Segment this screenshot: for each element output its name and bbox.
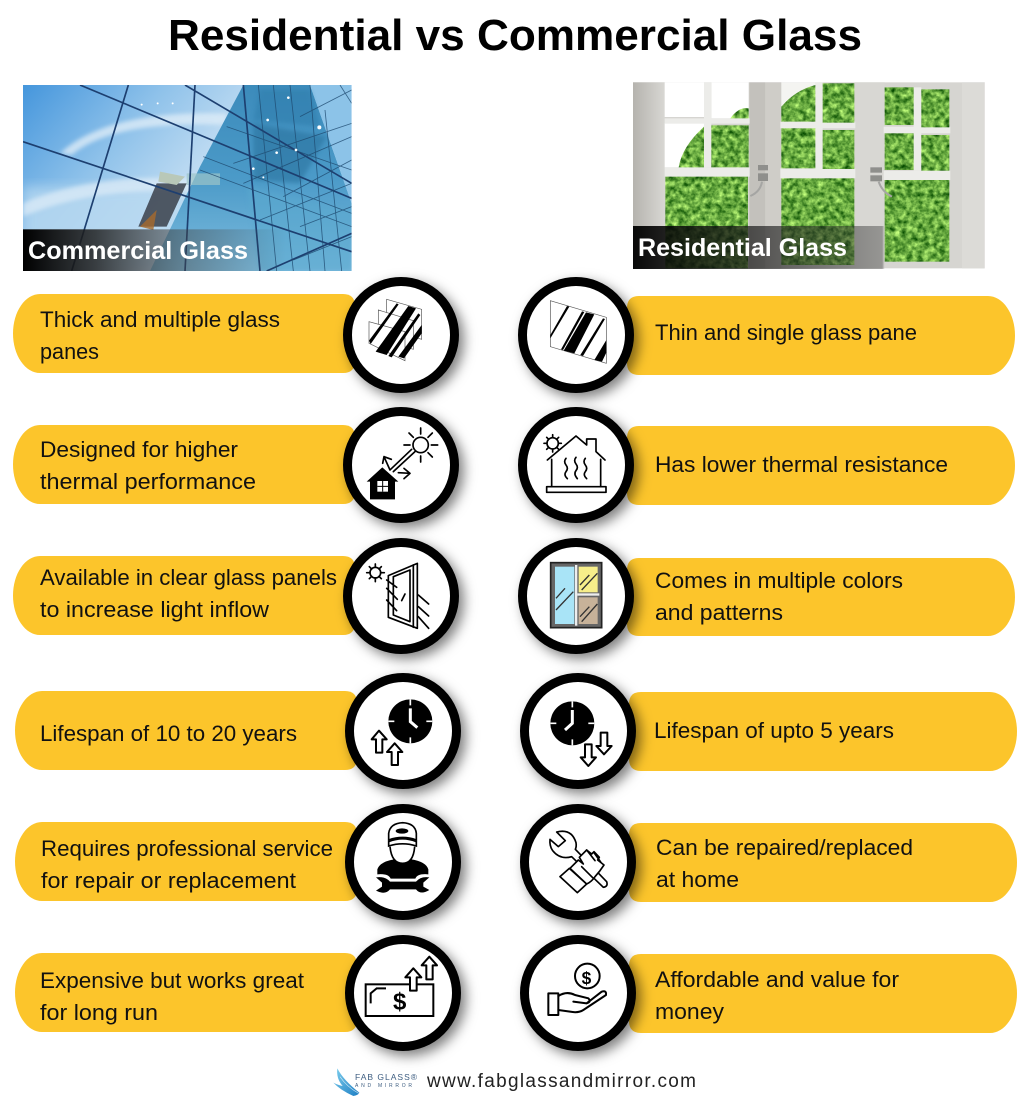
icon: multiple glass panes [348,282,454,388]
icon: clock with down arrows [524,678,632,784]
pill: affordable [629,954,1017,1033]
photo: residential glass [633,82,985,269]
pill: clear glass panels [13,556,355,635]
pill: thin and single glass pane [627,296,1015,375]
pill: repaired at home: Can be repaired/replaced [656,835,913,860]
icon: money with up arrows [350,940,456,1046]
pill: lower thermal resistance: Has lower thermal resistance [655,452,948,477]
icon: thermal sun and house [348,412,454,518]
pill: lower thermal resistance [627,426,1015,505]
icon: money with up arrows: $ [393,988,406,1015]
pill: lifespan upto 5 years: Lifespan of upto 5 years [654,718,894,743]
icon: coloured window [522,542,630,650]
icon: clock with up arrows [350,678,456,784]
caption: commercial glass: Commercial Glass [28,237,248,265]
pill: expensive [15,953,357,1032]
pill: higher thermal performance [13,425,355,504]
icon: window and sun light inflow [348,542,454,650]
pill: affordable: Affordable and value for [655,967,899,992]
pill: expensive: for long run [40,1000,158,1025]
photo: commercial glass [23,85,352,272]
icon: repair worker [350,808,456,916]
icon: wrench in hand [524,808,632,916]
pill: thick and multiple glass panes: panes [40,339,99,364]
pill: professional service: for repair or replacement [41,868,296,893]
pill: affordable: money [655,999,724,1024]
caption: residential glass: Residential Glass [638,234,847,262]
logo name: FAB GLASS® [355,1072,418,1082]
pill: thin and single glass pane: Thin and single glass pane [655,320,917,345]
title: Residential vs Commercial Glass [168,11,862,60]
pill: repaired at home [629,823,1017,902]
pill: professional service: Requires professional service [41,836,333,861]
icon: coin over hand: $ [582,968,592,988]
pill: lifespan upto 5 years [629,692,1017,771]
pill: thick and multiple glass panes: Thick and multiple glass [40,307,280,332]
icon: house with heat [522,412,630,518]
logo subtitle: AND MIRROR [355,1083,412,1089]
pill: lifespan 10 to 20 years: Lifespan of 10 to 20 years [40,721,297,746]
website url: www.fabglassandmirror.com [426,1071,696,1092]
pill: higher thermal performance: thermal performance [40,469,256,494]
pill: clear glass panels: to increase light inflow [40,597,269,622]
icon: coin over hand [524,940,632,1046]
pill: higher thermal performance: Designed for higher [40,437,238,462]
pill: expensive: Expensive but works great [40,968,304,993]
logo wings [333,1068,359,1096]
pill: clear glass panels: Available in clear glass panels [40,565,337,590]
pill: lifespan 10 to 20 years [15,691,357,770]
pill: multiple colors: and patterns [655,600,783,625]
pill: multiple colors: Comes in multiple colors [655,568,903,593]
pill: multiple colors [627,558,1015,636]
pill: professional service [15,822,357,901]
icon: thin glass pane [522,282,630,388]
pill: repaired at home: at home [656,867,739,892]
pill: thick and multiple glass panes [13,294,355,373]
footer logo [333,1068,418,1096]
